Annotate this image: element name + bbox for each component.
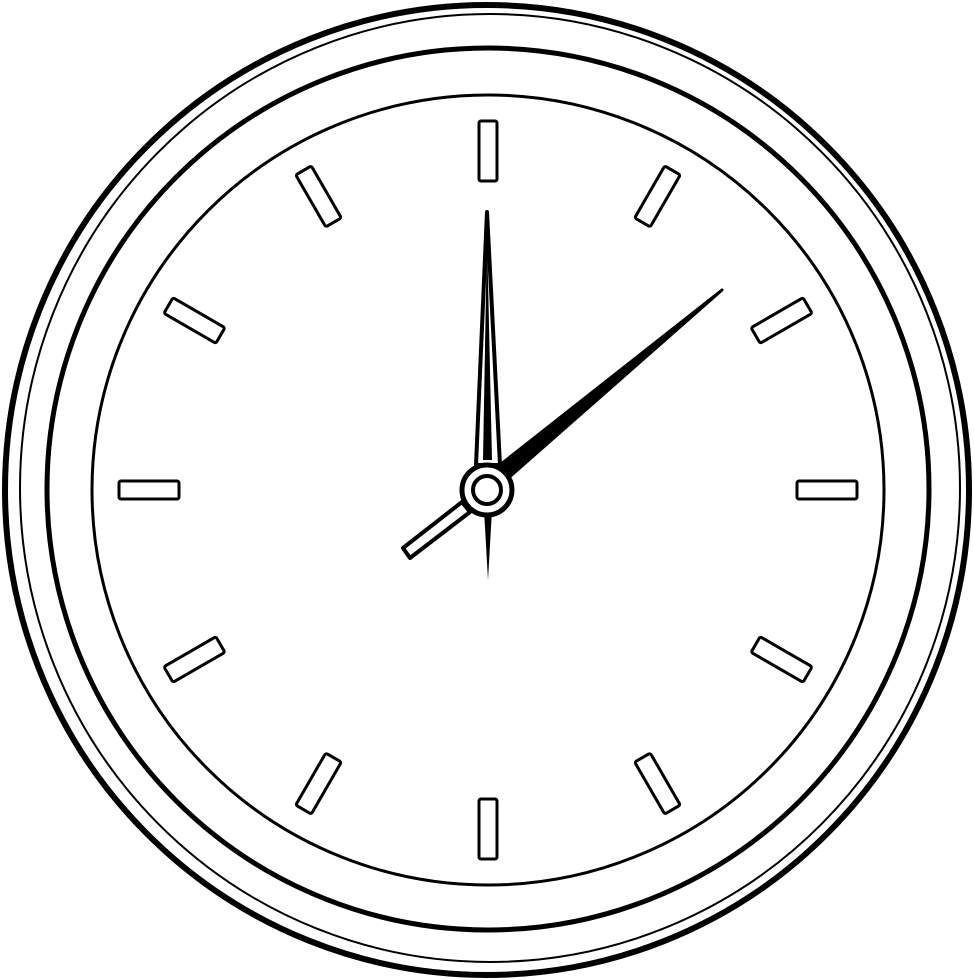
tail — [403, 502, 492, 580]
center hub — [462, 465, 512, 515]
hour ticks — [119, 121, 857, 859]
hour hand pointing up — [476, 212, 500, 465]
minute hand — [496, 290, 722, 480]
